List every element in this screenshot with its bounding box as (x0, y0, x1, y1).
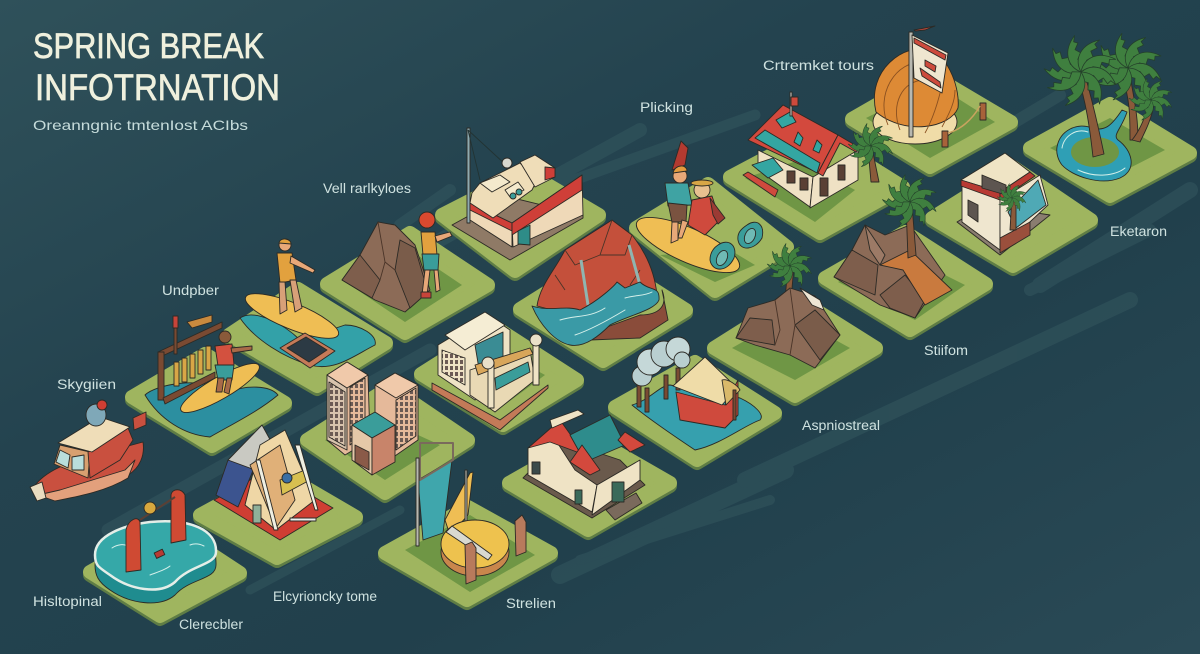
icon: waves (532, 282, 668, 345)
panel: palm lagoon (1030, 33, 1190, 199)
icon: palm crowns (1043, 33, 1174, 123)
labels: Eketaron (1110, 224, 1167, 239)
subtitle: Oreanngnic tmtenIost ACIbs (33, 117, 248, 133)
labels: Vell rarlkyloes (323, 181, 411, 196)
panel: ship building (442, 128, 599, 274)
icon: water (145, 383, 278, 437)
panel: city buildings (307, 362, 468, 496)
icon: hut (673, 357, 740, 428)
icon: house (743, 92, 860, 208)
labels: Hisltopinal (33, 594, 102, 609)
icon: climber (419, 212, 452, 298)
panel: red roof house (730, 92, 903, 236)
labels: Clerecbler (179, 617, 244, 632)
icon: banners and coin (416, 443, 526, 584)
background streaks (108, 95, 1190, 590)
icon: small palm (997, 183, 1027, 213)
panel: tent camp (200, 425, 356, 561)
icon: palm crown (767, 243, 814, 289)
icon: water (632, 385, 761, 450)
icon: waterfall stripes (581, 245, 640, 305)
icon: mansion (523, 410, 645, 520)
icon: palm crown (882, 174, 939, 230)
icon: water (240, 315, 375, 367)
icon: city buildings (327, 362, 418, 475)
icon: rocks and palm (736, 265, 840, 368)
panel: orange shell with flag (852, 26, 1011, 170)
icon: tugboat (30, 400, 146, 501)
title: INFOTRNATION (35, 67, 280, 108)
panel: rocks with palm (714, 243, 876, 399)
panel: red rock waterfall (520, 220, 686, 364)
panel: rocks with orange hut (825, 174, 986, 333)
icon: surfer (215, 331, 252, 394)
icon: pool (95, 521, 216, 603)
icon: surfboard and two people (630, 141, 763, 283)
icon: water ring (1057, 110, 1131, 181)
labels: Strelien (506, 596, 556, 611)
labels: Elcyrioncky tome (273, 589, 377, 604)
labels: Plicking (640, 100, 693, 115)
icon: modern building (957, 153, 1050, 255)
icon: tent (214, 425, 333, 540)
panel: surfer and xylophone (132, 315, 285, 449)
icon: surfboard (241, 285, 343, 347)
icon: red rock (537, 220, 657, 320)
labels: Undpber (162, 283, 220, 298)
labels: Crtremket tours (763, 58, 874, 73)
icon: beige tower (432, 312, 548, 430)
icon: rocks and palm (834, 205, 952, 318)
panel: coin and banners (385, 443, 551, 603)
panel: rocks with climber (327, 212, 488, 336)
icon: wooden frame (158, 315, 222, 404)
panel: modern building (932, 153, 1091, 269)
icon: orange shell (873, 26, 986, 147)
labels: Aspniostreal (802, 418, 880, 433)
panel: surfboard couple (630, 141, 787, 294)
panel: red and teal mansion (509, 410, 670, 533)
icon: rocks (342, 222, 430, 312)
icon: pillars (126, 490, 186, 572)
icon: palm (848, 123, 895, 182)
title (33, 27, 280, 108)
icon: palm trees (1077, 75, 1155, 157)
labels: Stiifom (924, 343, 968, 358)
title: SPRING BREAK (33, 27, 264, 66)
icon: trees (632, 337, 690, 412)
panel: beige tower with gate (421, 312, 577, 430)
icon: standing person (277, 239, 315, 314)
icon: box (280, 333, 335, 368)
panel: hut in flood (615, 337, 775, 463)
icon: surfboard (176, 356, 264, 420)
panel: surfboard and water box (229, 239, 386, 389)
labels: Skygiien (57, 377, 116, 392)
icon: ship building (452, 128, 583, 260)
panel: pool with pillars (90, 490, 240, 619)
